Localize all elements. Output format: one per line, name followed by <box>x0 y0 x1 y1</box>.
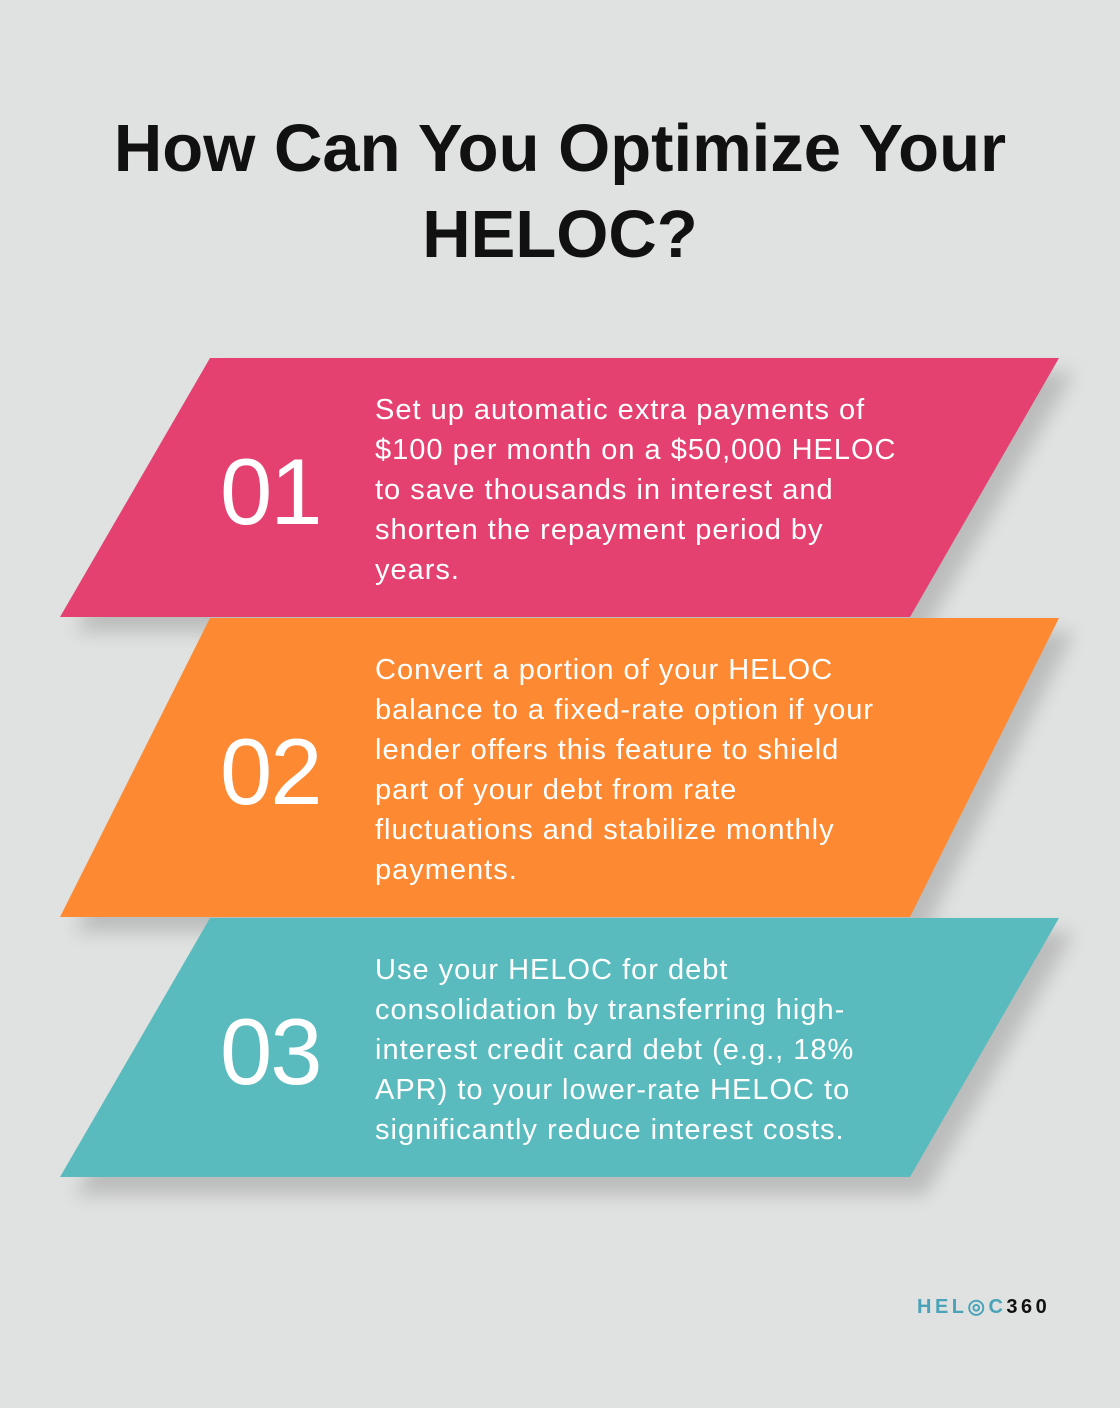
panel: step 03: Use your HELOC for debt <box>375 954 728 986</box>
panel: step 02: 02 <box>220 719 321 824</box>
shadows <box>75 372 1074 1195</box>
panel: step 01 <box>220 394 896 586</box>
panel: step 03: 03 <box>220 999 321 1104</box>
panel: step 03 <box>220 954 854 1146</box>
panel: step 02: lender offers this feature to shield <box>375 734 839 766</box>
panel: step 02: fluctuations and stabilize monthly <box>375 814 835 846</box>
panel: step 02: payments. <box>375 854 518 886</box>
title: HELOC? <box>422 197 698 272</box>
panel: step 01: Set up automatic extra payments of <box>375 394 865 426</box>
panel: step 02 <box>220 654 874 886</box>
title: How Can You Optimize Your <box>114 111 1006 186</box>
logo: HEL◎C360 <box>917 1296 1050 1318</box>
panel: step 03: APR) to your lower-rate HELOC to <box>375 1074 850 1106</box>
panel: step 03: significantly reduce interest costs. <box>375 1114 845 1146</box>
panel: step 01: to save thousands in interest and <box>375 474 834 506</box>
panel: step 02: Convert a portion of your HELOC <box>375 654 833 686</box>
band 3 shape <box>60 918 1059 1177</box>
panel: step 01: years. <box>375 554 460 586</box>
panel: step 03: interest credit card debt (e.g., 18% <box>375 1034 854 1066</box>
band 2 shape <box>60 618 1059 917</box>
panel: step 01: 01 <box>220 439 321 544</box>
panel: step 02: part of your debt from rate <box>375 774 737 806</box>
panel: step 01: $100 per month on a $50,000 HELOC <box>375 434 896 466</box>
title <box>114 111 1006 272</box>
panel: step 03: consolidation by transferring high- <box>375 994 845 1026</box>
panel: step 01: shorten the repayment period by <box>375 514 824 546</box>
panel: step 02: balance to a fixed-rate option if your <box>375 694 874 726</box>
band 1 shape <box>60 358 1059 617</box>
